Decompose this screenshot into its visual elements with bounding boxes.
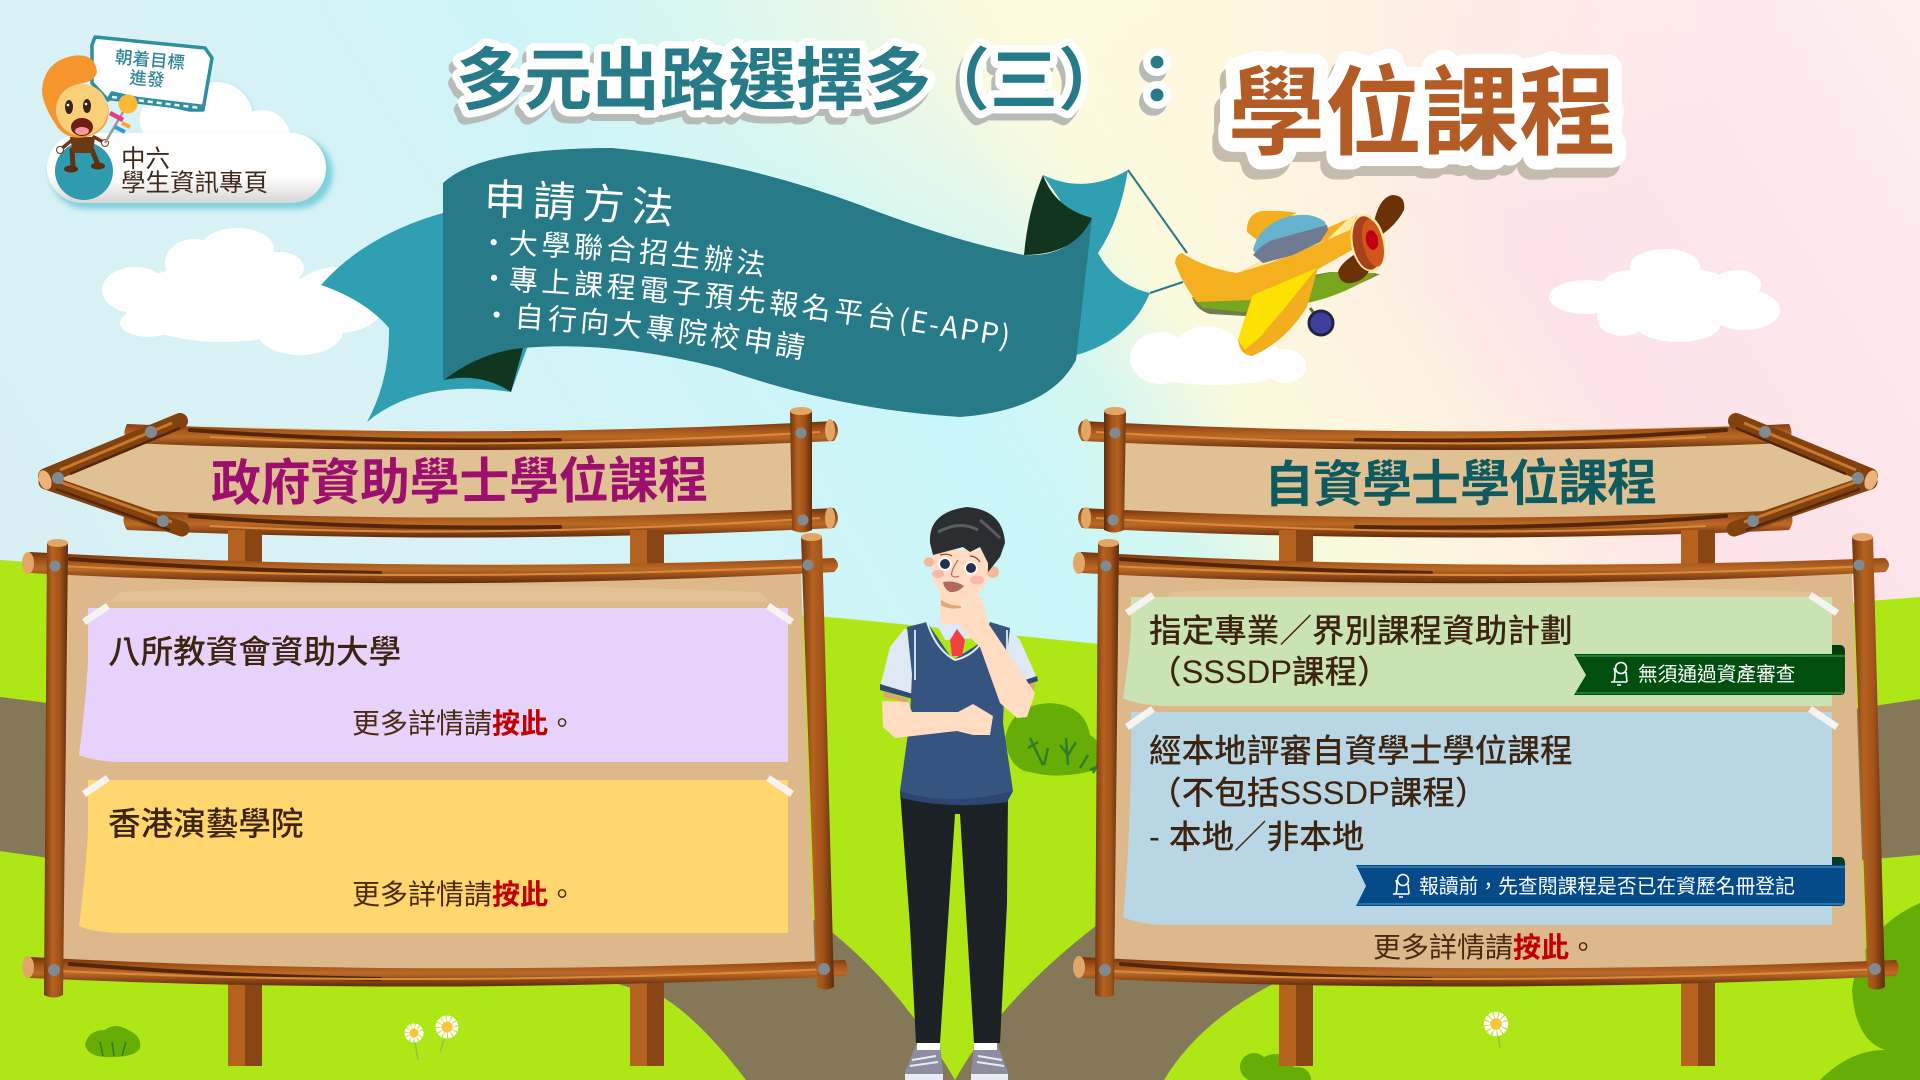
ribbon: 無須通過資產審查 (1574, 645, 1845, 695)
plane wheel (1309, 308, 1333, 335)
logo text (121, 145, 268, 197)
cloud: left (102, 228, 386, 355)
shoes (905, 1043, 1008, 1080)
banner heading: 申請方法 (488, 179, 672, 227)
card: 香港演藝學院: 香港演藝學院 (108, 805, 303, 842)
mascot (42, 55, 138, 173)
bush: bottom left (85, 1026, 140, 1057)
card: local accredited: （不包括SSSDP課程） (1149, 774, 1488, 811)
bush: bottom right (1820, 903, 1920, 1080)
logo cloud (140, 82, 290, 166)
panel: government-funded sign (22, 407, 848, 1066)
arrow sign right (1078, 407, 1880, 538)
cloud: right (1549, 249, 1780, 342)
banner: 申請方法 (321, 148, 1188, 422)
trousers (900, 791, 1008, 1043)
speech bubble (92, 37, 212, 110)
speech bubble: 朝着目標 (114, 47, 186, 73)
arm raised (960, 597, 1035, 718)
plane belly (1192, 272, 1380, 316)
card: local accredited: - 本地／非本地 (1149, 818, 1364, 855)
logo text: 中六 (121, 145, 170, 173)
icon: bell (1611, 662, 1627, 685)
banner ropes (1128, 170, 1187, 293)
vest (900, 622, 1013, 804)
sleeves (880, 628, 1038, 703)
flowers (407, 1015, 1505, 1060)
banner list: ·專上課程電子預先報名平台(E-APP) (491, 266, 1008, 352)
icon: bell (1393, 874, 1409, 897)
arrow sign left (36, 407, 838, 538)
icon: airplane (1175, 195, 1404, 356)
sky clouds and ground scene (0, 228, 1920, 1080)
logo text: 學生資訊專頁 (121, 169, 268, 197)
banner main ribbon (443, 148, 1092, 417)
student figure (880, 507, 1038, 1080)
card: local accredited: 經本地評審自資學士學位課程 (1149, 732, 1573, 769)
board left (22, 530, 848, 1066)
plane wing (1238, 268, 1318, 356)
ribbon: 報讀前: 報讀前，先查閱課程是否已在資歷名冊登記 (1419, 876, 1795, 898)
title highlight: 學位課程: 學位課程 (1228, 59, 1616, 168)
card: 八所教資會資助大學 (79, 606, 792, 762)
card: 八所教資會資助大學: 八所教資會資助大學 (108, 633, 401, 670)
plane propeller (1338, 195, 1404, 283)
banner right tail (1043, 170, 1150, 355)
plane cockpit (1253, 215, 1328, 263)
neck shadow (941, 600, 961, 609)
panel: self-financing sign (1073, 407, 1898, 1066)
logo pill (47, 133, 333, 209)
plane tail fin (1247, 211, 1297, 240)
bush: behind student (1005, 703, 1110, 776)
link: 更多詳情請按此: 更多詳情請按此。 (1373, 932, 1597, 963)
speech bubble: 進發 (129, 68, 165, 90)
ribbon: 無須通過資產審查: 無須通過資產審查 (1638, 664, 1796, 686)
banner list: ·大學聯合招生辦法 (490, 230, 764, 278)
heading: 自資學士學位課程: 自資學士學位課程 (1264, 455, 1657, 513)
head (924, 507, 1005, 605)
title line: 多元出路選擇多（三）：: 多元出路選擇多（三） ： (456, 43, 1191, 119)
logo: 學生資訊專頁 (42, 37, 333, 209)
card: local accredited (1123, 709, 1837, 925)
bush: bottom centre right (1240, 1053, 1311, 1080)
card: 八所教資會資助大學: 更多詳情請按此。 (352, 708, 576, 739)
card: 香港演藝學院: 更多詳情請按此。 (352, 879, 576, 910)
cloud: under plane (1130, 326, 1306, 385)
tie (950, 629, 965, 656)
ribbon: 報讀前 (1356, 857, 1845, 906)
board right (1073, 530, 1898, 1066)
left path (0, 697, 955, 1080)
card: 香港演藝學院 (79, 778, 792, 933)
card: SSSDP: 指定專業／界別課程資助計劃 (1149, 612, 1573, 649)
neck (940, 595, 962, 628)
plane fuselage (1175, 215, 1357, 302)
arm lower (882, 701, 993, 738)
card: SSSDP (1123, 595, 1837, 706)
banner left tail (321, 213, 530, 422)
card: SSSDP: （SSSDP課程） (1149, 653, 1390, 690)
right path (955, 699, 1920, 1080)
banner list: ·自行向大專院校申請 (494, 303, 805, 360)
ground: green hills (0, 560, 1920, 1080)
heading: 政府資助學士學位課程: 政府資助學士學位課程 (211, 452, 708, 512)
banner dark folds (444, 175, 1092, 392)
